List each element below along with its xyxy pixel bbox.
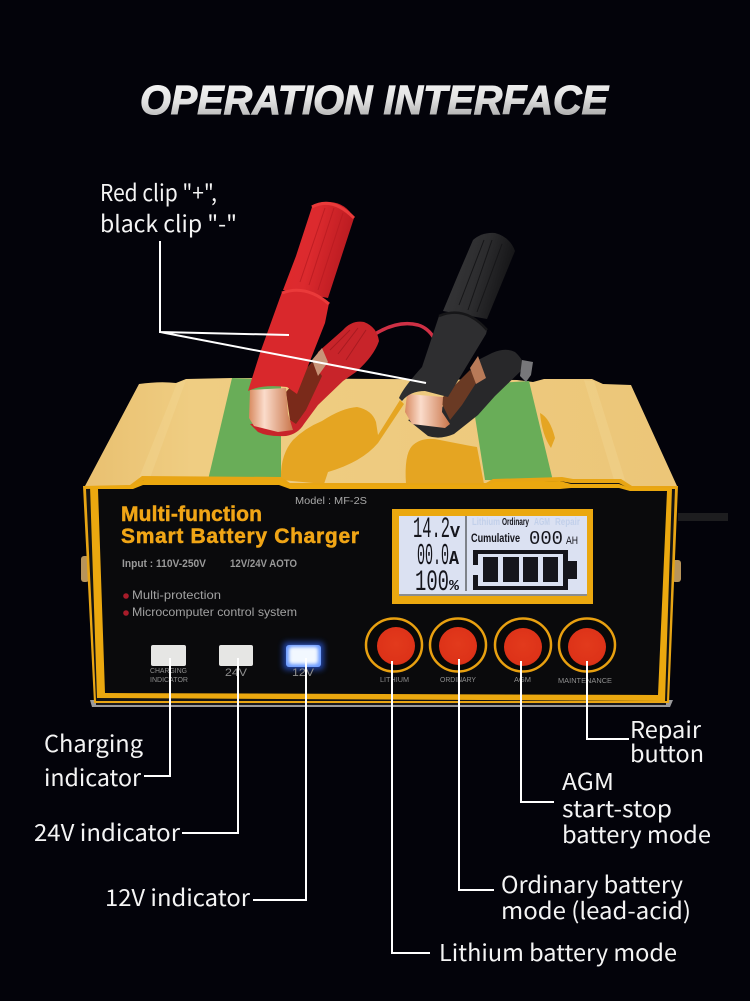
power cable — [678, 513, 728, 521]
jaw interior — [286, 362, 322, 424]
upper grip — [283, 202, 354, 298]
callout: repair button: button — [630, 735, 704, 769]
indicator lights — [151, 642, 324, 670]
base edge — [90, 700, 673, 707]
LCD mode row: Repair — [555, 517, 580, 528]
button labels: ORDINARY — [440, 677, 476, 684]
button labels: AGM — [514, 677, 531, 684]
grip ribs — [459, 240, 502, 312]
hinge — [312, 348, 328, 376]
product name — [121, 503, 359, 548]
LCD mode row: Lithium — [472, 517, 500, 528]
collar — [282, 290, 329, 304]
indicator labels: CHARGING — [150, 668, 187, 675]
LCD display — [392, 509, 593, 604]
product name: Smart Battery Charger — [121, 525, 359, 548]
lower handle ribs — [330, 328, 366, 360]
input specs: Input : 110V-250V — [122, 558, 207, 570]
LCD readings: 100 — [415, 566, 449, 600]
LCD cumulative row: Cumulative — [471, 531, 520, 545]
clip label — [100, 174, 237, 239]
mode buttons — [366, 618, 615, 672]
LCD readings: V — [450, 524, 461, 543]
upper grip — [443, 233, 515, 319]
grip cap — [312, 203, 354, 218]
callout: ordinary mode: Ordinary battery — [501, 866, 683, 900]
callout: AGM mode: start-stop — [562, 790, 672, 824]
callout: 24V indicator — [34, 658, 238, 848]
callout: repair button — [587, 661, 704, 769]
clip leader lines — [160, 241, 426, 383]
LCD readings: 00.0 — [417, 539, 449, 574]
LCD cumulative row — [471, 528, 578, 550]
red clip — [248, 202, 434, 436]
clip label: Red clip "+", — [100, 174, 217, 208]
indicator labels: 12V — [292, 667, 315, 679]
lower handle — [250, 322, 379, 436]
lower handle — [408, 350, 524, 438]
side bolts — [81, 556, 681, 582]
black face — [98, 485, 667, 695]
copper jaw — [405, 394, 450, 428]
copper jaw — [249, 388, 293, 432]
callout: ordinary mode — [459, 659, 691, 926]
callout: 12V indicator: 12V indicator — [105, 879, 250, 913]
green stripe right — [470, 381, 553, 481]
feature bullets — [123, 588, 297, 619]
callout: lithium mode — [392, 661, 677, 968]
LCD readings: 14.2 — [413, 513, 450, 547]
callout: charging indicator: indicator — [44, 759, 141, 793]
green stripe left — [208, 378, 281, 480]
LCD mode row — [472, 517, 580, 528]
model: Model : MF-2S — [295, 496, 367, 507]
collar — [439, 313, 487, 330]
grip ribs — [300, 208, 343, 290]
charger: front panel — [81, 476, 728, 707]
input specs — [122, 558, 297, 570]
LCD cumulative row: AH — [566, 535, 578, 547]
indicator labels — [150, 667, 315, 684]
title: OPERATION INTERFACE — [140, 77, 610, 123]
callout: charging indicator — [44, 658, 170, 793]
body — [248, 289, 329, 394]
feature bullets: Multi-protection — [132, 588, 221, 602]
callout: AGM mode: AGM — [562, 763, 614, 797]
product name: Multi-function — [121, 503, 262, 526]
LCD readings — [413, 513, 461, 600]
callout: 24V indicator: 24V indicator — [34, 814, 180, 848]
dark gap — [86, 480, 675, 701]
outer gold edge — [83, 476, 678, 703]
callout: charging indicator: Charging — [44, 725, 143, 759]
hinge — [470, 356, 486, 384]
LCD readings: % — [449, 578, 460, 595]
clip tip — [520, 360, 533, 382]
feature bullets: Microcomputer control system — [132, 605, 297, 619]
button labels: LITHIUM — [380, 677, 409, 684]
ridges — [139, 380, 186, 478]
callout: clips — [100, 174, 426, 383]
body — [399, 313, 487, 401]
indicator labels: INDICATOR — [150, 677, 188, 684]
LCD readings: A — [449, 548, 460, 570]
jaw interior — [440, 370, 478, 420]
black clip — [399, 233, 533, 438]
clip label: black clip "-" — [100, 205, 237, 239]
LCD mode row: Ordinary — [502, 517, 529, 528]
LCD cumulative row: 000 — [529, 528, 563, 550]
glossy reflection patches — [281, 400, 404, 484]
callout: repair button: Repair — [630, 711, 701, 745]
button labels: MAINTENANCE — [558, 678, 612, 685]
wire — [375, 324, 434, 338]
callout: ordinary mode: mode (lead-acid) — [501, 892, 691, 926]
callout: 12V indicator — [105, 658, 306, 913]
charger: top cover — [85, 378, 677, 486]
input specs: 12V/24V AOTO — [230, 558, 297, 570]
indicator labels: 24V — [225, 667, 248, 679]
top face — [85, 378, 677, 486]
callout: AGM mode: battery mode — [562, 816, 711, 850]
LCD mode row: AGM — [534, 517, 550, 528]
callout: AGM mode — [521, 661, 711, 850]
callout: lithium mode: Lithium battery mode — [439, 934, 677, 968]
button labels — [380, 677, 612, 685]
LCD battery gauge — [473, 550, 577, 590]
yellow frame — [90, 480, 672, 701]
